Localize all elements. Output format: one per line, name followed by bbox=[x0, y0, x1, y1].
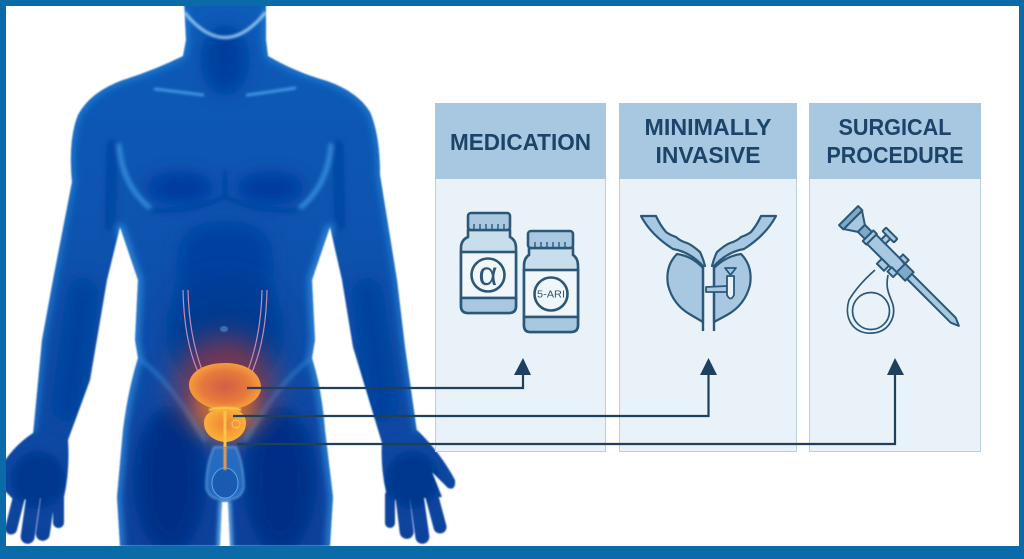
icon: prostate cross-section bbox=[641, 216, 776, 331]
panel: medication bbox=[435, 103, 606, 452]
muscle shading bbox=[12, 26, 438, 552]
panel: minimally invasive: INVASIVE bbox=[656, 142, 760, 168]
icon: alpha bottle: α bbox=[478, 255, 498, 292]
heading: surgical procedure: SURGICAL bbox=[838, 114, 952, 140]
bladder bbox=[189, 363, 261, 410]
icon: 5-ARI bottle: 5-ARI bbox=[537, 290, 565, 300]
panel: surgical procedure bbox=[809, 103, 981, 452]
panel: minimally invasive bbox=[619, 103, 797, 452]
urethra bbox=[209, 408, 241, 470]
heading: medication: MEDICATION bbox=[450, 129, 591, 155]
edge glow bbox=[33, 8, 417, 546]
arrow: urethra to surgical procedure bbox=[237, 358, 904, 444]
icon: resectoscope bbox=[839, 203, 972, 336]
navel bbox=[220, 326, 228, 332]
panel: surgical procedure: PROCEDURE bbox=[826, 142, 964, 168]
arrow: bladder to medication bbox=[247, 358, 531, 388]
genital outline bbox=[206, 447, 244, 499]
ureters bbox=[183, 290, 267, 372]
icon: 5-ARI bottle bbox=[524, 231, 578, 332]
anatomical body figure bbox=[0, 0, 470, 552]
arrow: prostate to minimally invasive bbox=[233, 358, 717, 416]
organ glow bbox=[175, 337, 275, 440]
highlight lines on chest and hips bbox=[119, 13, 331, 440]
prostate bbox=[204, 410, 246, 442]
heading: minimally invasive: MINIMALLY bbox=[644, 114, 772, 140]
icon: alpha bottle bbox=[461, 213, 516, 313]
